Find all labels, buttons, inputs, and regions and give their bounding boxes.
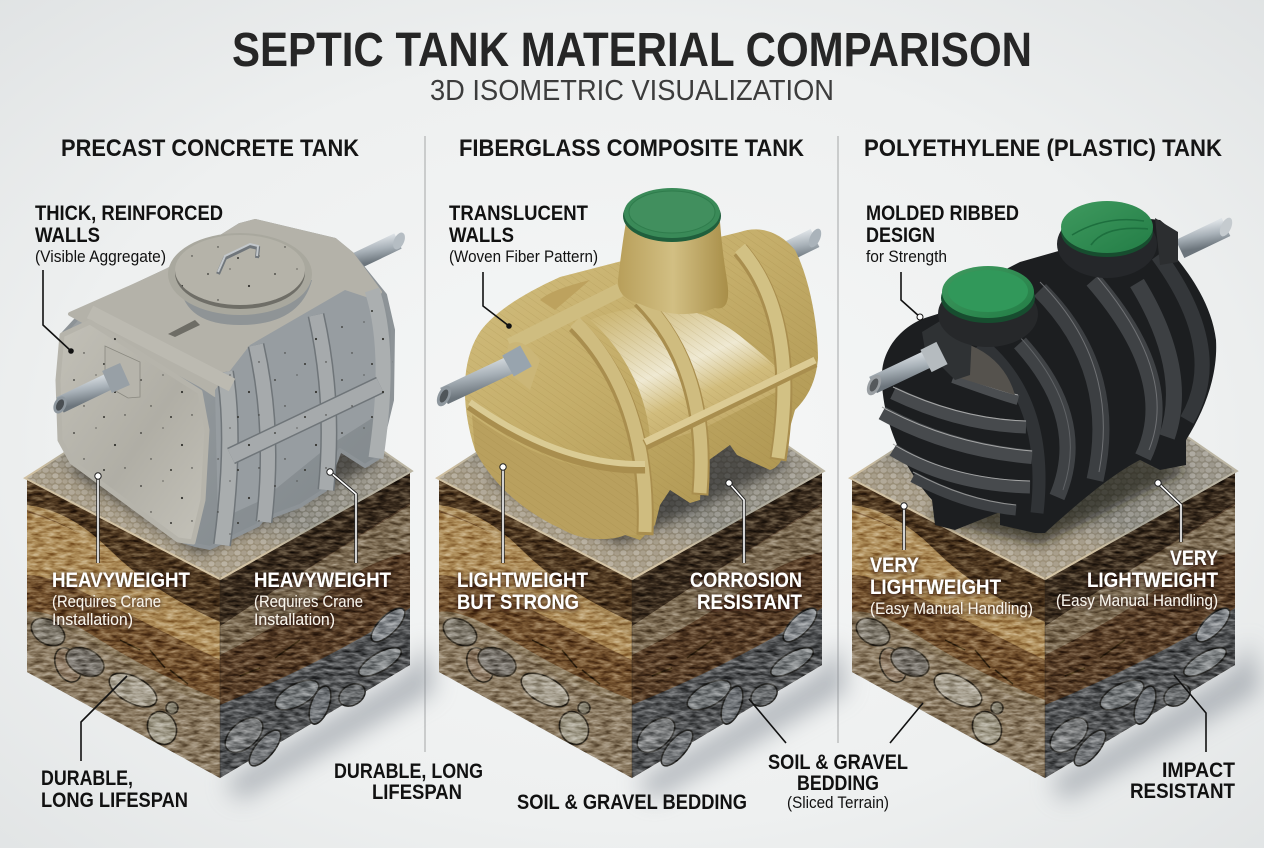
green lid — [623, 188, 721, 242]
heading: precast: PRECAST CONCRETE TANK — [61, 135, 359, 162]
callout: corrosion resistant: RESISTANT — [697, 591, 802, 614]
callout: heavyweight right: (Requires Crane — [254, 592, 363, 611]
callout: heavyweight left: (Requires Crane — [52, 592, 161, 611]
callout: very lightweight right: VERY — [1170, 547, 1218, 570]
callout: corrosion resistant — [690, 480, 802, 614]
callout: lightweight but strong — [457, 464, 588, 614]
callout: thick reinforced walls — [35, 202, 223, 354]
front riser with green lid — [922, 266, 1038, 380]
callout: translucent walls — [449, 202, 598, 329]
callout: durable long lifespan — [41, 676, 188, 812]
callout: durable long lifespan: DURABLE, — [41, 767, 133, 790]
callout: heavyweight right: Installation) — [254, 610, 335, 629]
callout: molded ribbed design: MOLDED RIBBED — [866, 202, 1019, 225]
front pipe — [51, 374, 125, 416]
rear riser with green lid — [1057, 201, 1178, 278]
callout: corrosion resistant: CORROSION — [690, 569, 802, 592]
callout: very lightweight right: LIGHTWEIGHT — [1087, 569, 1218, 592]
callout: lightweight but strong: LIGHTWEIGHT — [457, 569, 588, 592]
terrain block with layers — [438, 395, 822, 778]
panel: fiberglass composite tank — [334, 135, 847, 814]
rear pipe — [1180, 216, 1235, 249]
callout: translucent walls: (Woven Fiber Pattern) — [449, 247, 598, 266]
callout: very lightweight left: LIGHTWEIGHT — [870, 576, 1001, 599]
callout: very lightweight left: VERY — [870, 554, 919, 577]
heading: polyethylene: POLYETHYLENE (PLASTIC) TANK — [864, 135, 1222, 162]
callout: soil and gravel bedding, sliced terrain: SOIL & GRAVEL — [768, 751, 908, 774]
callout: very lightweight right — [1056, 480, 1218, 610]
callout: heavyweight left: HEAVYWEIGHT — [52, 569, 190, 592]
terrain shadow — [225, 640, 435, 800]
title: SEPTIC TANK MATERIAL COMPARISON — [232, 24, 1032, 77]
callout: thick reinforced walls: WALLS — [35, 224, 100, 247]
polyethylene tank — [864, 201, 1235, 545]
callout: translucent walls: TRANSLUCENT — [449, 202, 588, 225]
callout: thick reinforced walls: THICK, REINFORCED — [35, 202, 223, 225]
terrain block with layers — [26, 395, 410, 778]
callout: heavyweight left: Installation) — [52, 610, 133, 629]
terrain shadow — [1050, 640, 1260, 800]
front pipe — [864, 353, 942, 398]
callout: lightweight but strong: BUT STRONG — [457, 591, 579, 614]
callout: thick reinforced walls: (Visible Aggregate) — [35, 247, 166, 266]
callout: soil and gravel bedding, sliced terrain — [768, 703, 923, 812]
callout: durable long lifespan: LONG LIFESPAN — [41, 789, 188, 812]
callout: soil and gravel bedding: SOIL & GRAVEL BEDDING — [517, 791, 747, 814]
callout: heavyweight right: HEAVYWEIGHT — [254, 569, 391, 592]
concrete tank — [51, 221, 407, 555]
ribs on front face — [882, 345, 1032, 510]
callout: impact resistant: RESISTANT — [1130, 780, 1235, 803]
callout: molded ribbed design: for Strength — [866, 247, 947, 266]
rear pipe — [352, 231, 407, 263]
terrain block with layers — [851, 395, 1235, 778]
callout: molded ribbed design: DESIGN — [866, 224, 935, 247]
panel: precast concrete tank — [26, 135, 435, 812]
panel: polyethylene tank — [768, 135, 1260, 812]
manhole riser and lid — [168, 233, 312, 325]
callout: heavyweight left — [52, 473, 190, 629]
callout: soil and gravel bedding, sliced terrain: BEDDING — [797, 772, 879, 795]
callout: translucent walls: WALLS — [449, 224, 514, 247]
ribs on long side — [980, 255, 1202, 513]
callout: impact resistant — [1130, 675, 1235, 803]
callout: very lightweight right: (Easy Manual Handling) — [1056, 591, 1218, 610]
terrain shadow — [637, 640, 847, 800]
callout: very lightweight left — [870, 503, 1033, 618]
heading: fiberglass: FIBERGLASS COMPOSITE TANK — [459, 135, 804, 162]
callout: soil and gravel bedding, sliced terrain: (Sliced Terrain) — [787, 793, 889, 812]
front pipe — [434, 356, 526, 409]
callout: durable long lifespan: LIFESPAN — [372, 781, 462, 804]
callout: very lightweight left: (Easy Manual Handling) — [870, 599, 1033, 618]
callout: durable long lifespan — [334, 760, 483, 804]
subtitle: 3D ISOMETRIC VISUALIZATION — [430, 75, 834, 107]
lid handle — [218, 246, 258, 274]
fiberglass tank — [434, 188, 824, 545]
callout: heavyweight right — [254, 469, 391, 629]
callout: durable long lifespan: DURABLE, LONG — [334, 760, 483, 783]
rear pipe — [766, 227, 824, 262]
riser neck — [618, 222, 728, 314]
callout: molded ribbed design — [866, 202, 1019, 320]
callout: impact resistant: IMPACT — [1162, 759, 1235, 782]
